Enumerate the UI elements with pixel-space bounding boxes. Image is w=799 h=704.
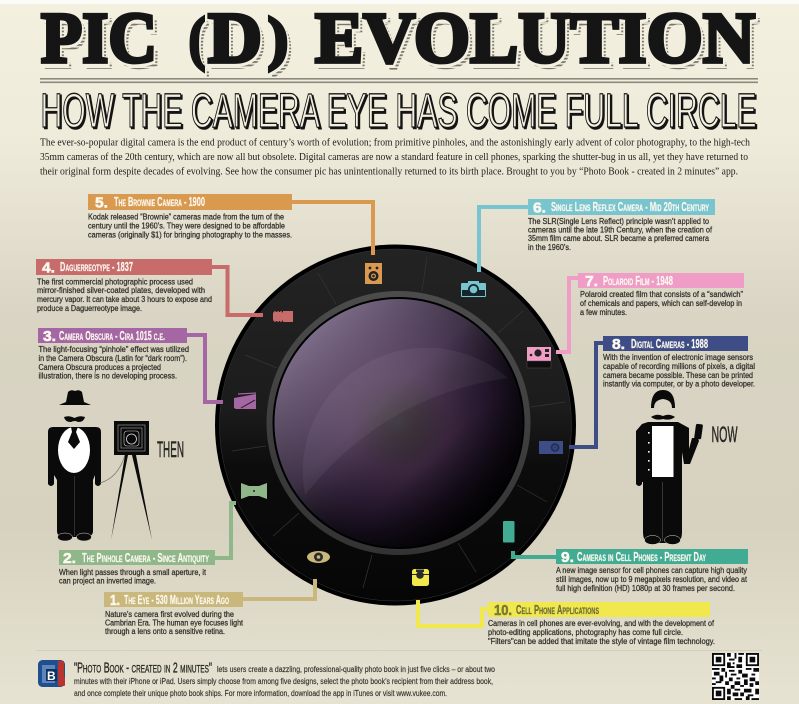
icon: daguerreotype camera [273,311,293,322]
title: ) [272,11,292,76]
heading bar 8: Digital Cameras - 1988 [631,337,708,351]
heading bar 7: 7. [585,273,598,290]
body text 3 [38,344,189,380]
title: PIC [41,0,157,78]
text: THEN [157,437,184,462]
body text 1: Cambrian Era. The human eye focuses light [105,618,243,628]
body text 4: mirror-finished silver-coated plates, developed with [37,285,205,295]
heading bar 1: The Eye - 530 Million Years Ago [124,593,229,607]
heading bar 5 [88,194,292,212]
title [41,0,759,83]
body text 7: a few minutes. [580,307,627,317]
panel: 7 polaroid film [578,273,744,317]
body text 4: produce a Daguerreotype image. [37,303,142,313]
title: EVOLUTION [319,3,759,83]
heading bar 2 [59,550,215,567]
panel: 3 camera obscura [38,328,189,380]
title: ) [269,8,289,73]
heading bar 4: 4. [42,260,55,276]
figure: man now [636,390,703,544]
heading bar 1: 1. [110,592,120,609]
body text 5: century until the 1960’s. They were designed to be affordable [88,220,285,230]
icon: pinhole camera [241,483,267,499]
title: ( [190,8,206,73]
intro text: their original form despite decades of evolving. See how the consumer pic has unintentionally returned to its birth place. Brought to you by “Photo Book - created in 2 minutes” app. [40,166,738,178]
panel: 4 daguerreotype [36,259,212,313]
panel: 10 cell phone applications [488,602,715,646]
panel: 2 pinhole camera [59,550,215,586]
title: EVOLUTION [315,0,755,78]
body text 2 [59,567,207,586]
body text 10 [488,618,715,646]
icon: slr camera [461,281,486,297]
heading bar 2: 2. [63,550,76,567]
icon: photo book app: B [47,669,56,683]
body text 7: Polaroid created film that consists of a “sandwich” [580,289,743,299]
panel: 6 slr camera [528,199,715,252]
title: D [212,3,266,83]
body text 9: A new image sensor for cell phones can capture high quality [556,565,748,575]
heading bar 3 [38,328,187,345]
body text 4: mercury vapor. It can take about 3 hours to expose and [37,294,212,304]
heading bar 5: 5. [95,194,108,212]
body text 7 [580,289,743,317]
intro text: The ever-so-popular digital camera is the end product of century’s worth of evolution; from primitive pinholes, and the astonishingly early advent of color photography, to the high-tech [40,138,751,148]
body text 2: can project an inverted image. [59,576,156,586]
intro text: 35mm cameras of the 20th century, which are now all but obsolete. Digital cameras are now a standard feature in cell phones, sparking the shutter-bug in us all, yet they have returned to [40,152,748,163]
icon: camera obscura [234,393,256,409]
title: D [209,0,263,80]
heading bar 9: Cameras in Cell Phones - Present Day [577,550,706,564]
title: ( [193,11,209,76]
body text 7: of chemicals and papers, which can self-develop in [580,298,742,308]
footer text: lets users create a dazzling, professional-quality photo book in just five clicks – or about two [217,665,495,674]
text: NOW [712,422,738,447]
footer text: "Photo Book - created in 2 minutes" [74,660,212,676]
body text 8 [603,352,755,388]
body text 2: When light passes through a small aperture, it [59,567,207,577]
heading bar 10: 10. [494,602,512,619]
heading bar 3: 3. [43,328,56,345]
figure: tripod camera [100,421,152,540]
connectors [185,202,605,626]
icon: photo app [412,569,429,586]
heading bar 6 [528,199,715,216]
body text 9: still images, now up to 9 megapixels resolution, and video at [556,574,748,584]
title: ) [268,6,288,71]
heading bar 1 [104,592,243,609]
body text 9 [556,565,748,593]
heading bar 6: 6. [533,200,546,216]
heading bar 7: Polaroid Film - 1948 [603,274,673,288]
body text 6: The SLR(Single Lens Reflect) principle wasn’t applied to [528,216,709,226]
heading bar 4 [36,259,212,276]
heading bar 4: Daguerreotype - 1837 [60,260,133,274]
heading bar 10 [488,602,710,619]
body text 10: photo-editing applications, photography has come full circle. [488,627,683,637]
icon: polaroid camera [527,347,551,368]
panel: 1 the eye [104,592,243,636]
body text 6: in the 1960’s. [528,242,571,252]
body text 3: illustration, there is no developing process. [38,370,177,380]
panel: 5 brownie camera [88,194,292,240]
heading bar 10: Cell Phone Applications [516,603,599,617]
heading bar 9 [556,549,748,566]
body text 8: With the invention of electronic image sensors [603,352,753,362]
body text 3: in the Camera Obscura (Latin for “dark room”). [38,353,187,363]
title: ( [189,6,205,71]
body text 6 [528,216,713,252]
body text 8: capable of recording millions of pixels, a digital [603,361,755,371]
body text 6: cameras until the late 19th Century, when the creation of [528,224,713,234]
body text 1: through a lens onto a sensitive retina. [105,626,225,636]
panel: 9 cameras in cell phones [556,549,748,593]
qr code [712,653,759,700]
title: PIC [42,0,158,80]
body text 4: The first commercial photographic process used [37,276,193,286]
body text 8: camera became possible. These can be printed [603,370,753,380]
footer text [74,660,495,698]
body text 8: instantly via computer, or by a photo developer. [603,378,755,388]
body text 6: 35mm film came about. SLR became a preferred camera [528,233,709,243]
heading bar 8: 8. [612,336,625,353]
body text 9: full high definition (HD) 1080p at 30 frames per second. [556,583,735,593]
icon: eye [307,551,330,563]
lens [215,244,576,606]
heading bar 9: 9. [561,549,574,566]
heading bar 3: Camera Obscura - Cira 1015 c.e. [59,329,165,343]
body text 5: cameras (originally $1) for bringing photography to the masses. [88,230,292,240]
heading bar 5: The Brownie Camera - 1900 [114,195,205,209]
title: EVOLUTION [316,0,756,80]
panel: 8 digital cameras [603,336,755,388]
body text 1: Nature’s camera first evolved during the [105,609,234,619]
figure: man then [48,390,101,541]
intro text [40,138,751,178]
footer text: and once complete their unique photo book ships. For more information, download the app in iTunes or visit www.vukee.com. [74,689,447,698]
footer text: minutes with their iPhone or iPad. Users simply choose from among five designs, select the photo book’s recipient from their address book, [74,677,493,686]
body text 3: The light-focusing “pinhole” effect was utilized [38,344,189,354]
icon: digital camera [539,441,563,454]
heading bar 8 [603,336,748,353]
title: PIC [45,3,161,83]
heading bar 7 [578,273,744,290]
body text 5: Kodak released “Brownie” cameras made from the turn of the [88,212,284,222]
icon: brownie camera [365,263,382,284]
icon: photo book app [38,660,65,687]
body text 10: "Filters"can be added that imitate the style of vintage film technology. [488,636,715,646]
heading bar 2: The Pinhole Camera - Since Antiquity [82,551,209,565]
body text 1 [105,609,243,636]
title: D [208,0,262,78]
body text 5 [88,212,292,240]
body text 10: Cameras in cell phones are ever-evolving, and with the development of [488,618,714,628]
body text 4 [37,276,212,313]
icon: cell phone [503,521,514,542]
body text 3: Camera Obscura produces a projected [38,362,161,372]
